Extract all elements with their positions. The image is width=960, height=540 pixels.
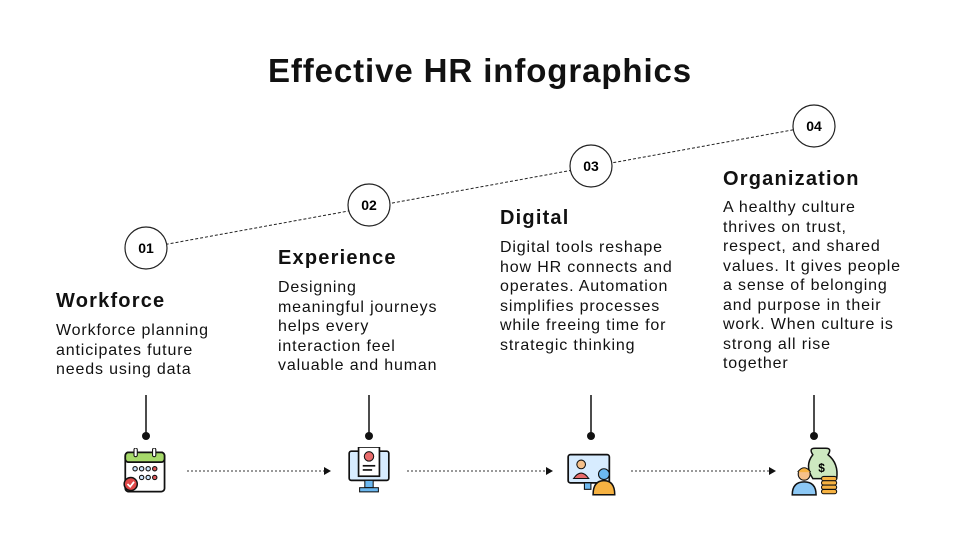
title: Effective HR infographics (268, 52, 692, 89)
text: Experience: valuable and human (278, 357, 437, 374)
text: Workforce: anticipates future (56, 342, 193, 358)
text: Digital: how HR connects and (500, 258, 673, 276)
icon: monitor profile (348, 447, 390, 492)
text: Experience: Designing (278, 279, 357, 296)
heading: Digital: Digital (500, 207, 570, 229)
heading: Organization: Organization (723, 168, 860, 190)
text: Organization: a sense of belonging (723, 277, 888, 294)
text: Experience: interaction feel (278, 338, 396, 354)
connector: dashed line and number circles: 02 (361, 197, 377, 213)
heading: Workforce: Workforce (56, 290, 165, 312)
text: Experience: helps every (278, 318, 369, 335)
text: Workforce (56, 322, 209, 378)
text: Organization (723, 199, 901, 372)
text: Digital: Digital tools reshape (500, 239, 663, 256)
heading: Experience: Experience (278, 247, 397, 269)
icon: calendar (123, 448, 166, 492)
text: Organization: together (723, 355, 789, 372)
text: Digital: while freeing time for (500, 317, 666, 334)
text: Workforce: Workforce planning (56, 322, 209, 339)
text: Organization: respect, and shared (723, 238, 881, 255)
text: Organization: work. When culture is (723, 316, 894, 333)
text: Digital: operates. Automation (500, 278, 668, 295)
text: Organization: A healthy culture (723, 199, 856, 216)
text: Workforce: needs using data (56, 361, 191, 378)
text: Organization: values. It gives people (723, 258, 901, 274)
text: Digital: simplifies processes (500, 298, 660, 314)
text: Organization: and purpose in their (723, 296, 881, 314)
text: Experience: meaningful journeys (278, 298, 437, 316)
text: Digital (500, 239, 673, 354)
connector: dashed line and number circles: 03 (583, 158, 599, 174)
connector: dashed line and number circles: 01 (138, 240, 154, 256)
icon: money bag person (792, 448, 838, 496)
connector: dashed line and number circles: 04 (806, 118, 822, 134)
icon: video call (567, 454, 616, 496)
icon: money bag person: $ (818, 461, 825, 475)
text: Organization: thrives on trust, (723, 218, 847, 236)
text: Organization: strong all rise (723, 336, 831, 352)
text: Digital: strategic thinking (500, 336, 635, 354)
text: Experience (278, 279, 437, 374)
